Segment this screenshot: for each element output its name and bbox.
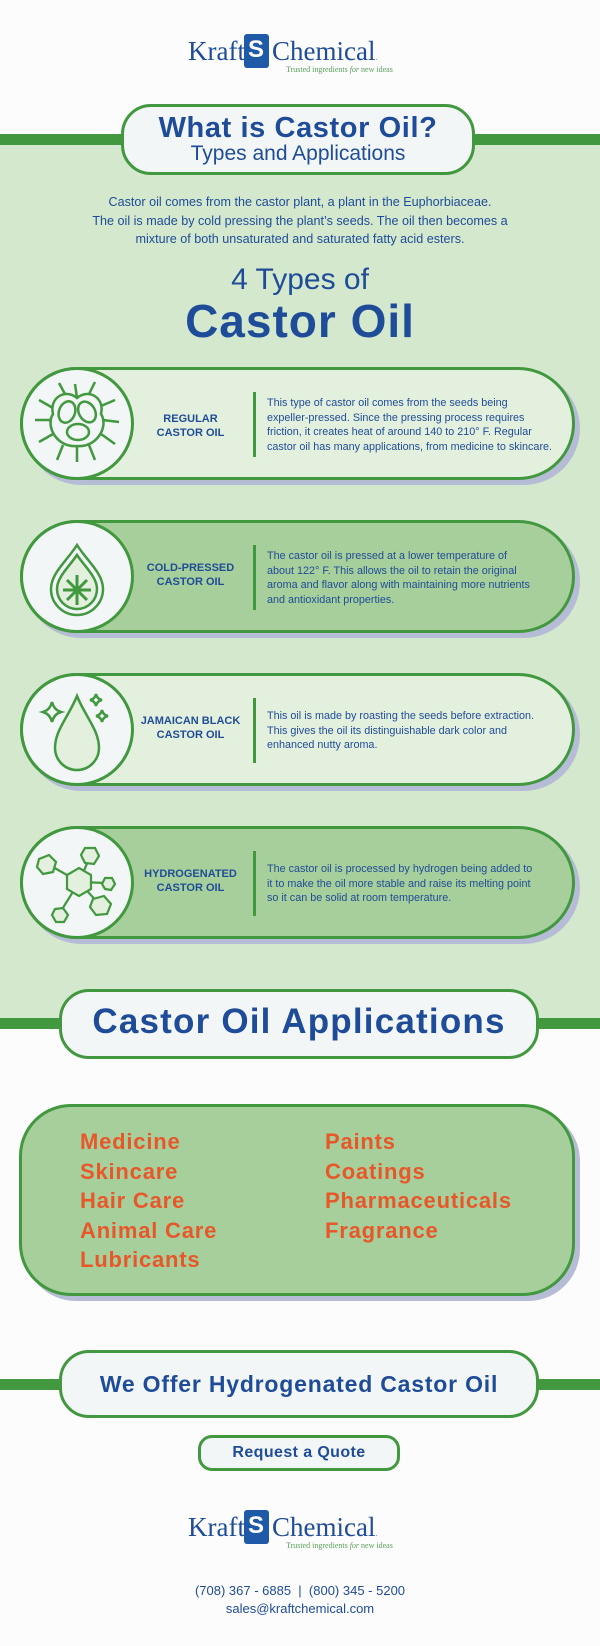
list left: Animal Care [80, 1218, 217, 1242]
logo top: Kraft [188, 36, 245, 66]
card: hydrogenated: The castor oil is processed by hydrogen being added to [267, 863, 532, 875]
card: cold-pressed: and antioxidant properties. [267, 594, 394, 606]
button: request a quote: Request a Quote [232, 1444, 366, 1461]
card: regular [20, 367, 575, 480]
card: regular: REGULAR [163, 413, 218, 425]
logo footer: Kraft [188, 1512, 245, 1542]
icon: drop with snowflake [20, 520, 134, 633]
list right: Pharmaceuticals [325, 1188, 512, 1213]
card: jamaican black: enhanced nutty aroma. [267, 739, 377, 751]
list left [80, 1129, 217, 1272]
logo top: Trusted ingredients for new ideas [286, 65, 393, 74]
list right [325, 1129, 512, 1242]
card: jamaican black: CASTOR OIL [157, 729, 224, 741]
contact info: (708) 367 - 6885 | (800) 345 - 5200 [195, 1583, 405, 1598]
card: hydrogenated: CASTOR OIL [157, 882, 224, 894]
list left: Skincare [80, 1158, 178, 1184]
card: cold-pressed: COLD-PRESSED [147, 562, 234, 574]
logo footer: Chemical. [272, 1512, 377, 1542]
list left: Medicine [80, 1129, 181, 1154]
heading: applications [59, 989, 539, 1059]
list right: Coatings [325, 1158, 426, 1184]
card: regular: CASTOR OIL [157, 427, 224, 439]
card: cold-pressed: CASTOR OIL [157, 576, 224, 588]
heading: 4 types [185, 263, 415, 347]
logo top: S [248, 36, 264, 63]
icon: castor seed [20, 367, 134, 480]
card: jamaican black: JAMAICAN BLACK [141, 715, 240, 727]
list right: Paints [325, 1129, 396, 1154]
card: hydrogenated: so it can be solid at room temperature. [267, 892, 451, 904]
icon: drop with sparkles [20, 673, 134, 786]
list left: Hair Care [80, 1188, 185, 1213]
logo footer: Trusted ingredients for new ideas [286, 1541, 393, 1550]
heading: offer [59, 1350, 539, 1418]
card: regular: castor oil has many applications, from medicine to skincare. [267, 440, 552, 452]
card: cold-pressed: about 122° F. This allows the oil to retain the original [267, 564, 517, 576]
green background section [0, 145, 600, 1023]
logo top: Chemical. [272, 36, 377, 66]
button: request a quote [198, 1435, 400, 1471]
heading: 4 types: Castor Oil [185, 295, 415, 347]
card: hydrogenated: it to make the oil more stable and raise its melting point [267, 878, 530, 890]
card: regular: friction, it creates heat of around 140 to 210° F. Regular [267, 426, 532, 438]
icon: molecule [20, 826, 134, 939]
card: cold-pressed [20, 520, 575, 633]
contact info: sales@kraftchemical.com [226, 1601, 374, 1616]
heading: applications: Castor Oil Applications [92, 1002, 506, 1041]
card: regular: This type of castor oil comes from the seeds being [267, 397, 508, 409]
card: hydrogenated [20, 826, 575, 939]
contact info [195, 1583, 405, 1616]
logo top [188, 34, 393, 74]
card: cold-pressed: aroma and flavor along with maintaining more nutrients [267, 579, 530, 591]
card: regular: expeller-pressed. Since the pressing process requires [267, 412, 524, 424]
panel: applications list [19, 1104, 575, 1296]
logo footer [188, 1510, 393, 1550]
intro paragraph [92, 195, 508, 246]
title box: Types and Applications [191, 142, 405, 165]
heading: offer: We Offer Hydrogenated Castor Oil [100, 1371, 498, 1397]
intro paragraph: The oil is made by cold pressing the plant’s seeds. The oil then becomes a [92, 214, 508, 228]
card: jamaican black [20, 673, 575, 786]
intro paragraph: mixture of both unsaturated and saturated fatty acid esters. [135, 232, 465, 246]
heading: 4 types: 4 Types of [231, 263, 369, 296]
card: jamaican black: This gives the oil its distinguishable dark color and [267, 724, 507, 736]
list right: Fragrance [325, 1218, 439, 1242]
card: cold-pressed: The castor oil is pressed at a lower temperature of [267, 550, 507, 562]
card: hydrogenated: HYDROGENATED [144, 868, 237, 880]
card: jamaican black: This oil is made by roasting the seeds before extraction. [267, 710, 534, 722]
list left: Lubricants [80, 1247, 200, 1272]
title box [121, 104, 475, 175]
logo footer: S [248, 1512, 264, 1539]
intro paragraph: Castor oil comes from the castor plant, a plant in the Euphorbiaceae. [109, 195, 491, 209]
title box: What is Castor Oil? [159, 112, 437, 144]
